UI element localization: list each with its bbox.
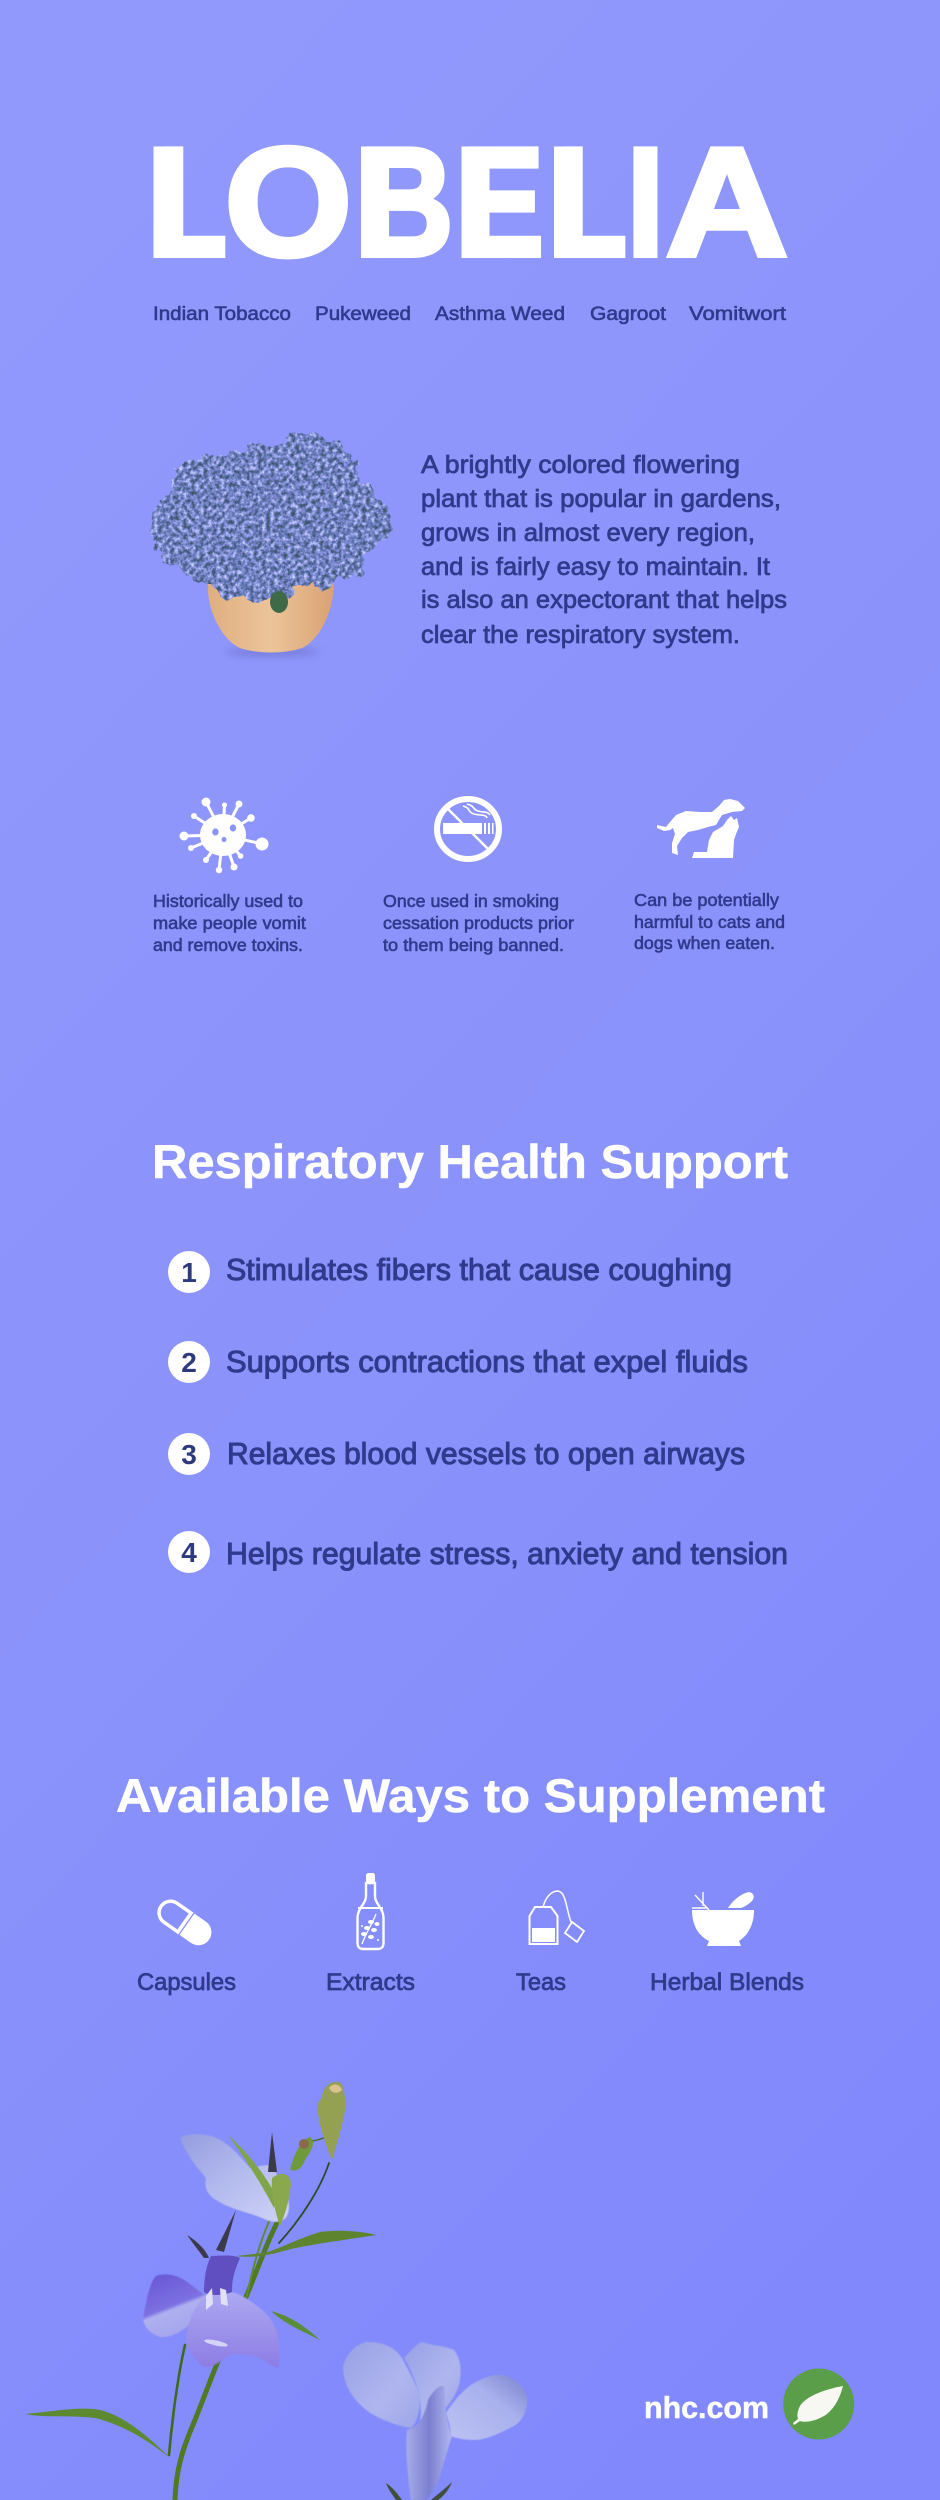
label: herbal blends: Herbal Blends — [650, 1969, 804, 1996]
lobelia flower stems and blossoms — [25, 2082, 527, 2500]
description: and is fairly easy to maintain. It — [421, 553, 770, 581]
list item 3: Relaxes blood vessels to open airways — [227, 1436, 745, 1471]
fact: pets — [634, 890, 785, 953]
icon: no smoking — [437, 799, 499, 859]
fact: smoking — [383, 891, 574, 955]
fact: pets: Can be potentially — [634, 890, 779, 910]
title: I — [626, 115, 664, 288]
label: teas: Teas — [516, 1969, 566, 1996]
leaf: middle — [271, 2311, 320, 2340]
description: plant that is popular in gardens, — [421, 485, 781, 513]
icon: capsule — [154, 1896, 217, 1950]
title: O — [224, 115, 352, 288]
alternate names: Vomitwort — [689, 303, 787, 325]
title — [154, 115, 788, 289]
alternate names: Pukeweed — [315, 303, 411, 325]
fact: vomit: make people vomit — [153, 913, 306, 933]
description: is also an expectorant that helps — [421, 586, 787, 614]
label: extracts: Extracts — [326, 1969, 415, 1996]
logo: nhc.com — [644, 2390, 769, 2425]
blue right flower — [343, 2342, 420, 2428]
fact: pets: dogs when eaten. — [634, 933, 775, 953]
label: capsules: Capsules — [137, 1969, 236, 1996]
logo — [644, 2368, 854, 2440]
heading: respiratory health support: Respiratory Health Support — [152, 1135, 788, 1188]
description: clear the respiratory system. — [421, 621, 740, 649]
icon: tea bag — [530, 1891, 584, 1944]
description — [421, 451, 787, 649]
fact: vomit: and remove toxins. — [153, 935, 303, 955]
list item 2: Supports contractions that expel fluids — [226, 1344, 748, 1379]
list item 3: 3 — [181, 1439, 197, 1470]
list item 4: 4 — [181, 1537, 197, 1568]
description: grows in almost every region, — [421, 519, 755, 547]
heading: available ways to supplement: Available Ways to Supplement — [116, 1769, 825, 1822]
fact: smoking: Once used in smoking — [383, 891, 559, 911]
title: L — [556, 115, 627, 288]
title: L — [157, 115, 227, 289]
alternate names: Asthma Weed — [435, 303, 565, 325]
title: E — [461, 115, 544, 289]
fact: vomit — [153, 891, 306, 955]
alternate names — [153, 303, 787, 325]
description: A brightly colored flowering — [421, 451, 740, 479]
icon: dog and cat — [657, 799, 745, 858]
fact: smoking: to them being banned. — [383, 935, 564, 955]
list item 1: 1 — [181, 1257, 197, 1288]
purple middle flower — [143, 2274, 208, 2337]
sepals and spikes — [187, 2132, 277, 2258]
bud — [317, 2082, 346, 2160]
list item 4: Helps regulate stress, anxiety and tension — [226, 1536, 788, 1571]
alternate names: Indian Tobacco — [153, 303, 291, 325]
icon: virus — [180, 798, 268, 873]
icon: mortar and pestle — [692, 1892, 754, 1946]
title: B — [360, 116, 454, 289]
pale top flower — [180, 2134, 289, 2222]
title: A — [666, 116, 788, 289]
potted lobelia plant — [150, 432, 392, 656]
icon: extract bottle — [358, 1873, 384, 1949]
leaf: lower left — [25, 2409, 170, 2458]
list item 2: 2 — [181, 1347, 197, 1378]
leaf: upper right — [236, 2231, 377, 2257]
fact: pets: harmful to cats and — [634, 912, 785, 932]
small bud cluster — [290, 2137, 313, 2170]
fact: vomit: Historically used to — [153, 891, 303, 911]
fact: smoking: cessation products prior — [383, 913, 574, 933]
alternate names: Gagroot — [590, 303, 667, 325]
list item 1: Stimulates fibers that cause coughing — [226, 1252, 732, 1287]
